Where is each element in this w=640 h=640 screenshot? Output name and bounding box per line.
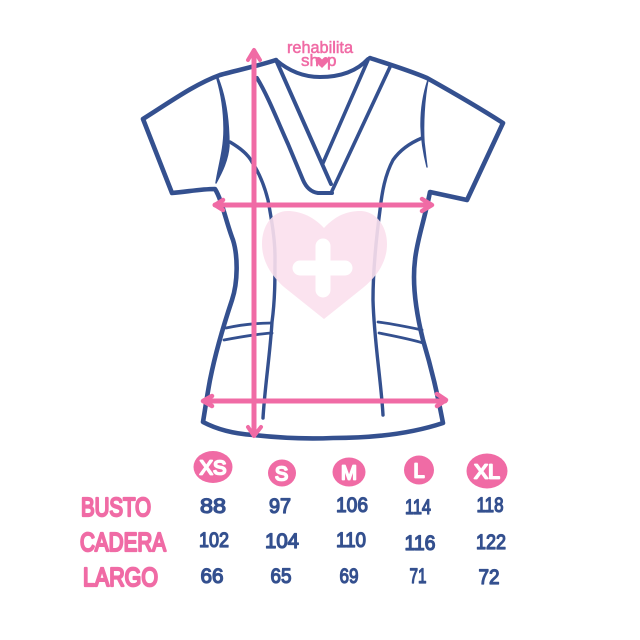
values: 69 bbox=[340, 565, 358, 588]
label: LARGO bbox=[83, 562, 158, 592]
left pocket bbox=[224, 323, 272, 340]
heart in logo bbox=[316, 57, 328, 68]
values bbox=[200, 565, 500, 589]
values: 106 bbox=[336, 494, 368, 517]
values: 65 bbox=[270, 565, 292, 588]
garment outline bbox=[143, 58, 503, 438]
size S: S bbox=[275, 464, 288, 486]
arrow: largo bbox=[248, 50, 261, 436]
row: cadera bbox=[80, 527, 506, 557]
right princess seam bbox=[373, 138, 422, 415]
size M bbox=[332, 458, 366, 486]
label: BUSTO bbox=[81, 492, 151, 522]
label: CADERA bbox=[80, 527, 167, 557]
values bbox=[200, 494, 504, 519]
left lapel bbox=[257, 60, 332, 193]
values: 88 bbox=[200, 495, 226, 518]
size XS: XS bbox=[200, 458, 226, 480]
size XL: XL bbox=[474, 462, 500, 484]
brand name line 2: shop bbox=[301, 51, 336, 70]
values: 66 bbox=[200, 565, 224, 588]
brand name line 1: rehabilita bbox=[287, 38, 354, 57]
size XL bbox=[466, 454, 508, 488]
values: 104 bbox=[265, 530, 299, 553]
cross bbox=[300, 246, 345, 290]
arrow: busto bbox=[215, 199, 432, 211]
values: 102 bbox=[199, 529, 229, 552]
left princess seam bbox=[230, 142, 275, 418]
row: largo bbox=[83, 562, 500, 592]
values: 118 bbox=[476, 494, 504, 517]
values bbox=[199, 529, 506, 555]
size S bbox=[268, 460, 296, 486]
row: busto bbox=[81, 492, 504, 522]
heart with cross logo bbox=[262, 211, 387, 319]
left armhole seam bbox=[216, 78, 229, 183]
right pocket bbox=[378, 322, 423, 343]
right lapel bbox=[323, 60, 390, 191]
right armhole seam bbox=[421, 80, 428, 167]
values: 97 bbox=[269, 495, 291, 518]
values: 114 bbox=[405, 496, 431, 519]
neckline bbox=[276, 59, 368, 77]
values: 71 bbox=[410, 565, 426, 588]
size M: M bbox=[341, 462, 357, 484]
size L bbox=[404, 456, 434, 484]
size header row bbox=[194, 451, 508, 488]
values: 122 bbox=[476, 531, 506, 554]
size L: L bbox=[413, 460, 425, 482]
arrow: cadera bbox=[203, 394, 446, 406]
size XS bbox=[194, 451, 232, 483]
values: 72 bbox=[478, 566, 500, 589]
brand logo bbox=[287, 38, 354, 70]
values: 116 bbox=[404, 532, 436, 555]
scrub top garment bbox=[143, 58, 503, 438]
heart bbox=[262, 211, 387, 319]
values: 110 bbox=[336, 529, 366, 552]
